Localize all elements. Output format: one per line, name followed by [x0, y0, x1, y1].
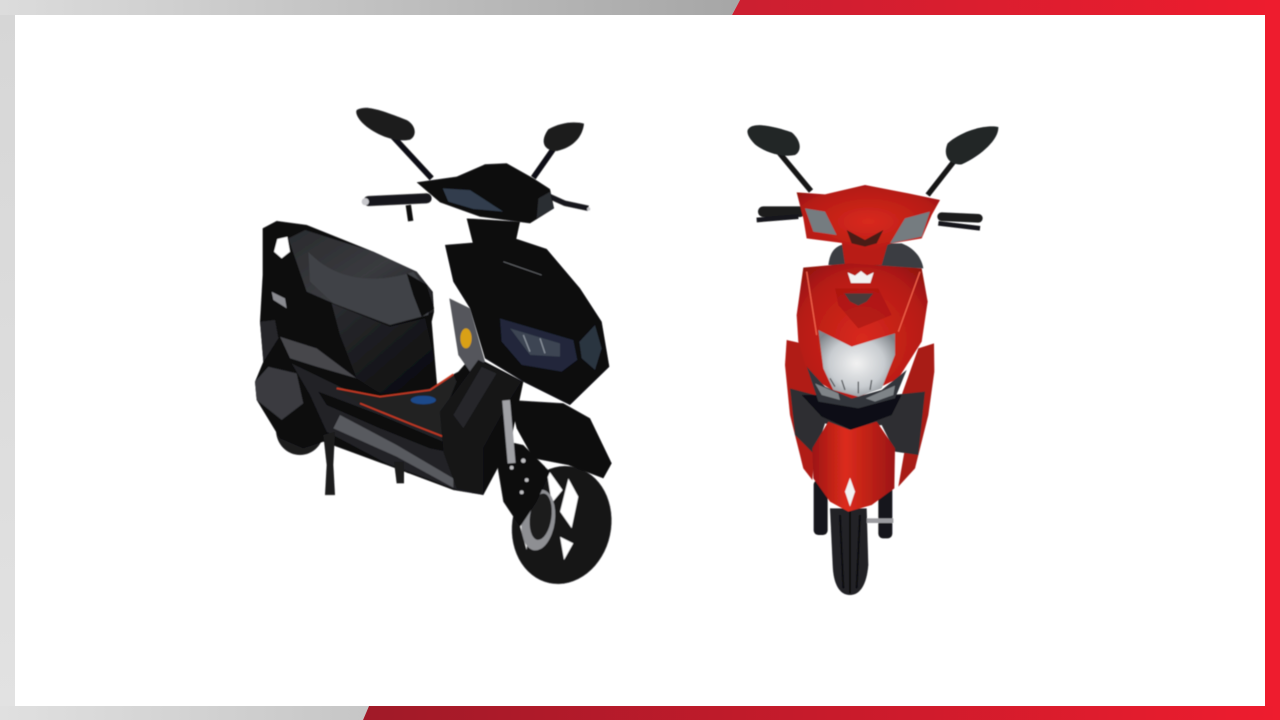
handlebar grips	[757, 212, 980, 228]
neck	[467, 218, 520, 245]
rear wheel	[276, 405, 324, 455]
handlebar cowl	[797, 185, 940, 252]
red scooter, front view	[747, 125, 998, 595]
headlight	[500, 318, 602, 372]
front fender	[510, 400, 612, 478]
front wheel	[501, 457, 622, 593]
front shield	[797, 263, 928, 402]
right mirror	[533, 122, 584, 178]
handlebar lamps	[805, 208, 930, 247]
front lower panel	[440, 360, 522, 495]
front fender	[812, 422, 895, 512]
rear shroud behind cowl	[828, 243, 923, 268]
yellow reflector	[460, 328, 472, 348]
headlight	[818, 330, 895, 397]
fender diamond marker	[845, 478, 855, 507]
lower body	[292, 363, 473, 493]
side stands	[323, 432, 404, 495]
rear motor housing	[255, 367, 303, 420]
dark lower grille	[790, 388, 925, 455]
handlebar grips	[362, 197, 590, 221]
under-seat panel	[332, 303, 437, 393]
left mirror	[356, 108, 432, 178]
turn lamps	[815, 383, 895, 402]
front tyre	[830, 508, 868, 595]
front shield	[445, 239, 609, 405]
right mirror	[928, 126, 998, 195]
white gap between rail and seat	[274, 237, 290, 258]
grey inner leg panel	[449, 298, 485, 372]
front fork	[497, 400, 550, 527]
left mirror	[747, 125, 811, 191]
handlebar cowl	[417, 163, 554, 223]
dark trim under headlight	[807, 367, 907, 408]
instrument cluster	[443, 188, 503, 212]
side panels	[785, 340, 818, 480]
crown logo	[844, 271, 874, 306]
seat	[288, 230, 434, 325]
floorboard with red trim	[337, 374, 457, 437]
black scooter, three-quarter view	[255, 108, 622, 593]
rear body highlights	[260, 292, 357, 378]
body silhouette	[255, 221, 523, 495]
fork legs	[814, 480, 893, 538]
